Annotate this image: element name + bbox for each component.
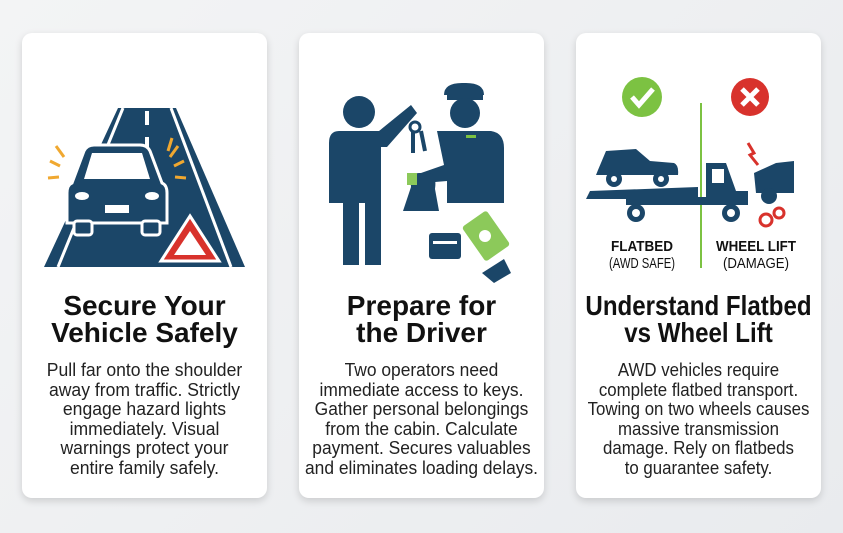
text block: massive transmission <box>618 418 779 439</box>
panel: secure vehicle <box>22 33 267 498</box>
panel: prepare driver <box>299 33 544 498</box>
text block: and eliminates loading delays. <box>305 457 538 478</box>
icon: road with car and hazard triangle <box>44 108 245 267</box>
text block: complete flatbed transport. <box>599 379 798 400</box>
heading <box>347 290 496 348</box>
heading: Secure Your <box>63 290 226 321</box>
text block: warnings protect your <box>60 437 229 458</box>
text block <box>588 359 809 478</box>
heading: the Driver <box>356 317 487 348</box>
icon: check <box>622 77 662 117</box>
text block: from the cabin. Calculate <box>325 418 518 439</box>
text block: damage. Rely on flatbeds <box>603 437 794 458</box>
icon: flatbed vs wheel lift comparison: (AWD SAFE) <box>609 255 675 272</box>
text block <box>305 359 538 478</box>
text block: Two operators need <box>345 359 498 380</box>
text block: payment. Secures valuables <box>312 437 531 458</box>
panel: flatbed vs wheel lift <box>576 33 821 498</box>
text block: to guarantee safety. <box>625 457 772 478</box>
text block: away from traffic. Strictly <box>49 379 240 400</box>
text block: AWD vehicles require <box>618 359 779 380</box>
text block: immediate access to keys. <box>320 379 523 400</box>
heading: Understand Flatbed <box>585 290 812 321</box>
heading <box>585 290 812 348</box>
icon: cross <box>731 78 769 116</box>
icon: flatbed vs wheel lift comparison: WHEEL LIFT <box>716 238 796 255</box>
icon: flatbed vs wheel lift comparison: (DAMAGE) <box>723 255 789 272</box>
heading: Vehicle Safely <box>51 317 238 348</box>
icon: flatbed vs wheel lift comparison <box>586 77 796 272</box>
text block: immediately. Visual <box>70 418 219 439</box>
icon: person handing keys to driver <box>329 83 511 283</box>
text block: Towing on two wheels causes <box>588 398 809 419</box>
text block: Gather personal belongings <box>315 398 528 419</box>
text block: entire family safely. <box>70 457 219 478</box>
icon: flatbed vs wheel lift comparison: FLATBED <box>611 238 673 255</box>
heading: Prepare for <box>347 290 496 321</box>
text block: Pull far onto the shoulder <box>47 359 242 380</box>
heading: vs Wheel Lift <box>624 317 773 348</box>
text block <box>47 359 242 478</box>
heading <box>51 290 238 348</box>
text block: engage hazard lights <box>63 398 226 419</box>
